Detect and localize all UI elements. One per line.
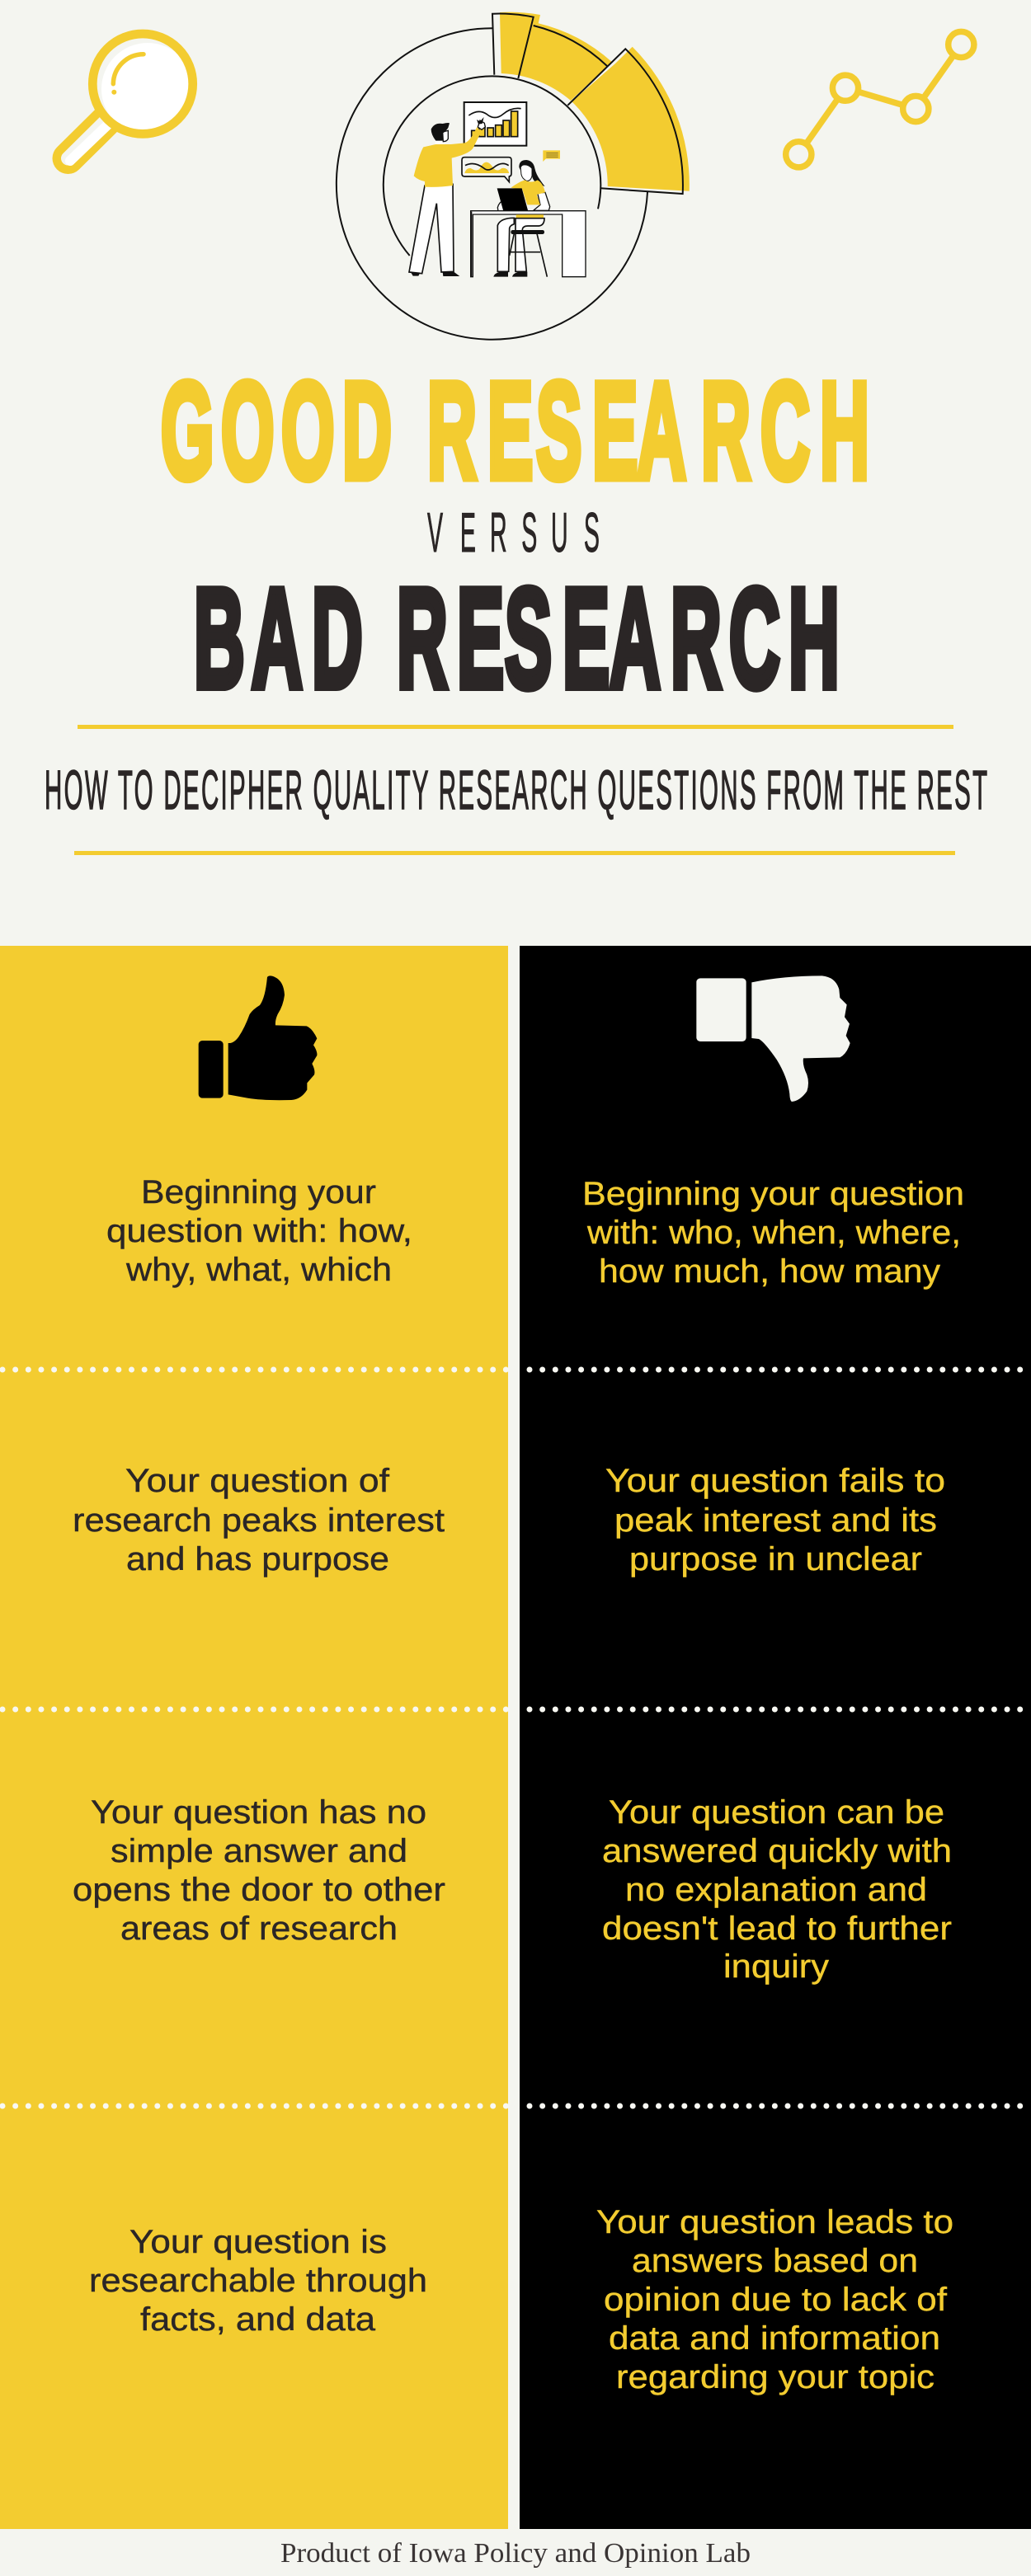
title: versus: VERSUS [427,502,600,565]
text: good row 3: opens the door to other [73,1872,445,1908]
text: bad row 1: how much, how many [599,1253,940,1290]
small note bubble [543,150,560,162]
text: bad row 4 [596,2204,953,2395]
icon: line chart [786,31,974,167]
text: good row 3: simple answer and [111,1833,407,1869]
text: bad row 3 [602,1794,952,1985]
text: bad row 1 [582,1176,964,1290]
text: good row 3 [73,1794,445,1947]
footer credit: Product of Iowa Policy and Opinion Lab [280,2538,751,2569]
text: bad row 3: inquiry [723,1948,829,1985]
text: good row 4 [89,2224,427,2338]
text: good row 1: question with: how, [106,1213,412,1249]
panel: bad research column [520,946,1031,2529]
text: good row 2: and has purpose [126,1541,389,1577]
text: good row 4: researchable through [89,2263,427,2299]
text: good row 4: facts, and data [140,2301,376,2338]
text: bad row 4: data and information [609,2320,940,2357]
text: good row 3: Your question has no [91,1794,426,1831]
text: bad row 1: with: who, when, where, [586,1215,961,1251]
text: bad row 2: Your question fails to [605,1463,945,1499]
text: bad row 4: regarding your topic [616,2359,934,2395]
text: bad row 2 [605,1463,945,1577]
text: bad row 4: Your question leads to [596,2204,953,2240]
icon: thumbs up [199,975,317,1100]
text: good row 2: Your question of [125,1463,390,1499]
icon: thumbs down [696,975,850,1102]
text: good row 1 [106,1174,412,1288]
text: good row 3: areas of research [120,1911,398,1947]
title: good research: GOOD RESEARCH [161,354,869,507]
people and desk [409,102,586,277]
text: bad row 1: Beginning your question [582,1176,964,1212]
man [409,117,485,276]
title: bad research: BAD RESEARCH [194,560,840,717]
text: bad row 4: answers based on [632,2243,918,2279]
text: good row 2 [73,1463,445,1577]
text: bad row 4: opinion due to lack of [604,2282,948,2318]
text: bad row 3: doesn't lead to further [602,1911,952,1947]
text: good row 1: why, what, which [125,1252,392,1288]
speech bubble [462,157,511,182]
text: bad row 2: peak interest and its [614,1502,937,1539]
radial chart [337,12,690,340]
woman [497,160,550,211]
chart board [464,102,526,146]
text: good row 1: Beginning your [141,1174,376,1210]
text: good row 2: research peaks interest [73,1502,445,1539]
panel: good research column [0,946,508,2529]
text: bad row 3: Your question can be [609,1794,944,1831]
text: good row 4: Your question is [129,2224,387,2260]
desk [471,211,586,277]
seated legs and stool [493,218,547,277]
icon: magnifying glass [68,34,194,161]
text: bad row 3: answered quickly with [602,1833,952,1869]
text: bad row 3: no explanation and [625,1872,927,1908]
illustration: radial chart with two researchers [337,12,690,340]
text: bad row 2: purpose in unclear [629,1541,922,1577]
subtitle: HOW TO DECIPHER QUALITY RESEARCH QUESTIONS FROM THE REST [45,759,987,820]
